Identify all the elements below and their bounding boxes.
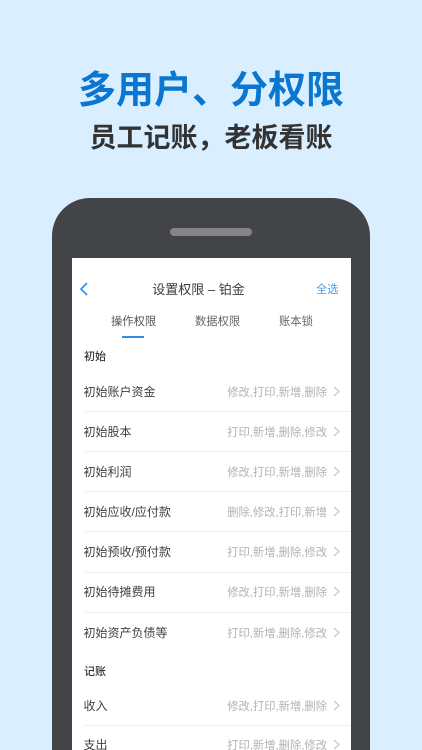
screen title: 设置权限 – 铂金 <box>152 282 245 297</box>
row: initial assets and liabilities <box>84 626 340 640</box>
row: initial advance payments <box>84 545 351 573</box>
active tab underline <box>122 336 144 338</box>
row: initial assets and liabilities: 打印,新增,删除,修改 <box>227 628 327 640</box>
row: initial deferred expenses: 初始待摊费用 <box>84 585 156 599</box>
title: 多用户、分权限 <box>78 70 344 112</box>
row: initial receivables and payables <box>84 505 351 532</box>
phone screen <box>72 258 351 750</box>
row: initial equity <box>84 425 351 452</box>
row: initial account funds <box>84 385 351 412</box>
row: initial equity: 初始股本 <box>84 425 132 439</box>
select all link: 全选 <box>316 284 338 296</box>
row: initial profit: 初始利润 <box>84 465 132 479</box>
row: initial assets and liabilities: 初始资产负债等 <box>84 626 168 640</box>
row: income <box>84 699 351 726</box>
row: initial receivables and payables: 初始应收/应付款 <box>84 505 171 519</box>
row: initial equity: 打印,新增,删除,修改 <box>227 427 327 439</box>
row: income: 修改,打印,新增,删除 <box>227 701 327 713</box>
tab: operation permissions: 操作权限 <box>111 316 156 328</box>
section heading: initial: 初始 <box>84 351 106 363</box>
row: initial account funds: 初始账户资金 <box>84 385 156 399</box>
icon: back arrow <box>80 282 88 296</box>
row: initial advance payments: 初始预收/预付款 <box>84 545 171 559</box>
row: initial advance payments: 打印,新增,删除,修改 <box>227 547 327 559</box>
subtitle: 员工记账，老板看账 <box>90 123 332 153</box>
row: initial profit <box>84 465 351 492</box>
row: expense <box>84 738 340 750</box>
tab: ledger lock: 账本锁 <box>279 316 313 328</box>
phone <box>52 198 370 750</box>
section heading: bookkeeping: 记账 <box>84 666 106 678</box>
phone speaker <box>170 228 252 236</box>
row: initial deferred expenses: 修改,打印,新增,删除 <box>227 587 327 599</box>
row: initial profit: 修改,打印,新增,删除 <box>227 467 327 479</box>
row: initial deferred expenses <box>84 585 351 613</box>
row: income: 收入 <box>84 699 108 713</box>
row: initial receivables and payables: 删除,修改,打印,新增 <box>227 507 327 519</box>
row: initial account funds: 修改,打印,新增,删除 <box>227 387 327 399</box>
tab: data permissions: 数据权限 <box>195 316 240 328</box>
